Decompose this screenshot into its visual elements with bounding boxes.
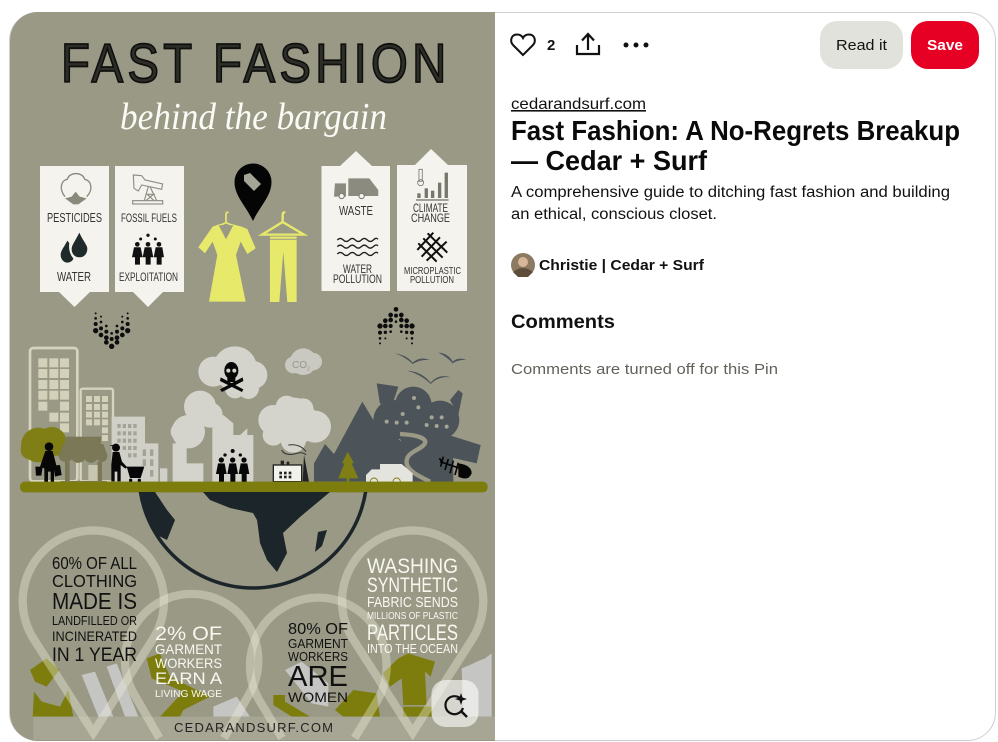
label: climate change: CLIMATE — [413, 201, 448, 215]
label: microplastic pollution: MICROPLASTIC — [404, 265, 461, 277]
icon: thermometer and bars — [416, 169, 449, 201]
description: an ethical, conscious closet. — [511, 206, 717, 223]
smoke and factory towers — [171, 346, 267, 482]
stat: 80 percent women: 80% OF — [288, 621, 348, 638]
fish skeleton — [439, 457, 472, 479]
winding road — [400, 434, 430, 482]
gray garments — [82, 653, 492, 717]
description: A comprehensive guide to ditching fast fashion and building — [511, 184, 950, 201]
source link: cedarandsurf.com — [511, 96, 646, 113]
landfill mound — [373, 383, 481, 482]
stat: 80 percent women: GARMENT — [288, 636, 348, 651]
panel: waste and water pollution — [322, 151, 390, 291]
pin title — [511, 115, 960, 176]
icon: skull and crossbones — [220, 362, 243, 392]
arrow: halftone down — [93, 313, 130, 349]
city buildings — [30, 348, 167, 482]
label: exploitation: EXPLOITATION — [119, 270, 178, 284]
garbage truck — [366, 464, 413, 485]
label: water: WATER — [57, 269, 91, 284]
button: visual search — [432, 680, 478, 727]
icon: cotton — [61, 174, 91, 204]
stat: washing synthetic fabric — [367, 555, 458, 656]
label: water pollution — [334, 264, 382, 283]
stat: washing synthetic fabric: MILLIONS OF PLASTIC — [367, 610, 458, 622]
like count: 2 — [547, 37, 555, 54]
stat: 60 percent landfilled: IN 1 YEAR — [52, 645, 137, 666]
title: FAST FASHION — [61, 33, 446, 94]
stat: washing synthetic fabric: FABRIC SENDS — [367, 594, 458, 611]
stat: 60 percent landfilled: MADE IS — [52, 588, 137, 614]
icon: oil pump — [133, 175, 163, 204]
label: water pollution: WATER — [343, 262, 372, 276]
button: save — [911, 21, 979, 69]
comments heading: Comments — [511, 312, 615, 333]
icon: price tag map pin — [234, 164, 272, 221]
olive garments — [30, 653, 435, 717]
panel: fossil fuels and exploitation — [115, 166, 184, 307]
cloud: CO2: 2 — [307, 366, 310, 372]
stat: washing synthetic fabric: INTO THE OCEAN — [367, 642, 458, 656]
icon: water drops — [61, 233, 87, 263]
pine tree — [338, 452, 358, 482]
stat: 60 percent landfilled: 60% OF ALL — [52, 553, 137, 573]
subtitle: behind the bargain — [120, 96, 387, 138]
button: read it: Read it — [836, 37, 888, 54]
label: water pollution: POLLUTION — [333, 272, 382, 286]
birds — [395, 353, 467, 384]
stat: washing synthetic fabric: PARTICLES — [367, 620, 458, 645]
stat: 2 percent living wage: LIVING WAGE — [155, 688, 222, 700]
icon: workers — [132, 234, 164, 265]
stat: washing synthetic fabric: WASHING — [367, 555, 458, 578]
stat: 80 percent women — [288, 621, 348, 705]
ground bar — [20, 482, 488, 492]
stat: 60 percent landfilled: INCINERATED — [52, 628, 137, 644]
scene: city, industry and landfill — [20, 307, 488, 492]
stat: 60 percent landfilled: CLOTHING — [52, 571, 137, 591]
stat: 2 percent living wage: EARN A — [155, 669, 223, 688]
icon: share — [577, 34, 599, 54]
icon: heart — [511, 34, 535, 55]
button: save: Save — [927, 37, 963, 54]
arrow: halftone up — [378, 307, 414, 344]
stat: 80 percent women: WORKERS — [288, 649, 348, 664]
panel: pesticides and water — [40, 166, 109, 307]
globe — [139, 360, 367, 588]
stat: 2 percent living wage: WORKERS — [155, 655, 222, 671]
pin rings — [23, 530, 483, 738]
stat: 2 percent living wage — [155, 623, 223, 700]
comments note: Comments are turned off for this Pin — [511, 361, 778, 378]
cloud: CO2 — [285, 348, 322, 375]
icon: microplastic mesh — [417, 233, 447, 262]
stat: 80 percent women: ARE — [288, 661, 348, 693]
description — [511, 184, 950, 223]
author avatar — [511, 253, 535, 277]
stat: washing synthetic fabric: SYNTHETIC — [367, 574, 458, 597]
label: pesticides: PESTICIDES — [47, 210, 102, 225]
label: microplastic pollution: POLLUTION — [410, 274, 454, 286]
workers group — [216, 449, 249, 482]
pin title: Fast Fashion: A No-Regrets Breakup — [511, 115, 960, 146]
garments and lower band — [23, 530, 495, 740]
icon: more dots — [624, 42, 648, 48]
stat: 80 percent women: WOMEN — [288, 689, 348, 705]
stat: 60 percent landfilled — [52, 553, 137, 666]
pin title: — Cedar + Surf — [511, 145, 708, 176]
website label: CEDARANDSURF.COM — [174, 720, 333, 735]
cloud: factory smoke — [258, 396, 331, 453]
label: climate change: CHANGE — [411, 211, 450, 225]
bottom band — [33, 717, 495, 740]
icon: yellow dress on hanger — [198, 212, 256, 302]
icon: garbage truck — [334, 178, 378, 199]
label: fossil fuels: FOSSIL FUELS — [121, 211, 177, 225]
stat: 2 percent living wage: GARMENT — [155, 641, 222, 657]
tree: olive — [20, 427, 66, 462]
panel: infographic image — [10, 12, 495, 741]
landfill specks — [385, 396, 449, 429]
stat: 2 percent living wage: 2% OF — [155, 623, 222, 645]
icon: waves — [337, 238, 378, 255]
author name: Christie | Cedar + Surf — [539, 258, 704, 274]
label: waste: WASTE — [339, 203, 373, 218]
cloud: CO2: CO — [292, 360, 307, 371]
icon: yellow trousers on hanger — [262, 212, 304, 302]
label: climate change — [411, 204, 450, 222]
button: read it — [820, 21, 903, 69]
figure: shopper with cart — [109, 444, 144, 482]
figure: woman with bags — [35, 442, 62, 485]
label: microplastic pollution — [404, 267, 461, 283]
shop — [59, 437, 107, 485]
factory — [273, 445, 309, 482]
stat: 60 percent landfilled: LANDFILLED OR — [52, 613, 137, 628]
panel: climate change and microplastics — [397, 149, 467, 291]
mountains — [314, 402, 407, 482]
